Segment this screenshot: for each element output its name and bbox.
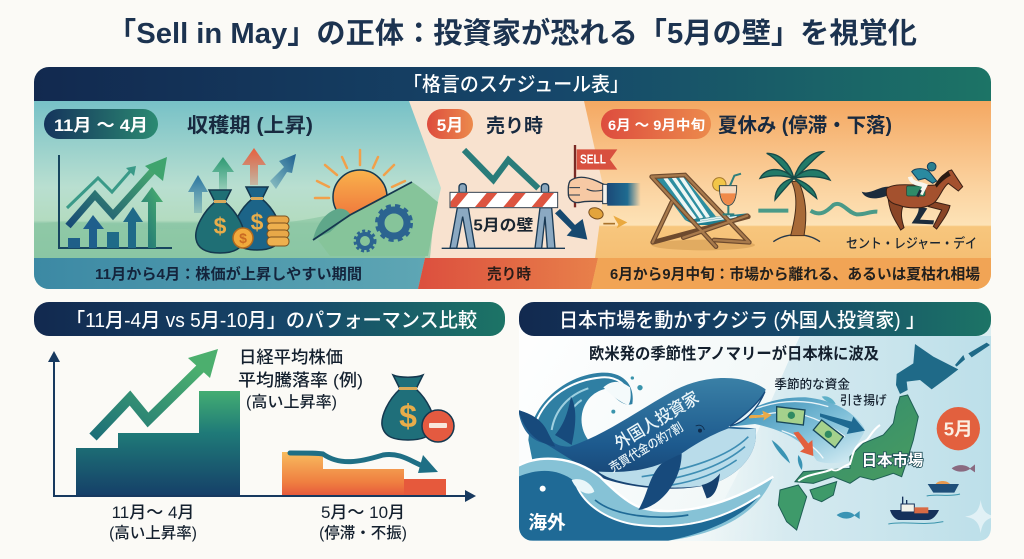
- label: Nikkei average: 平均騰落率 (例): [238, 371, 363, 390]
- icon: money bag minus: [382, 375, 454, 442]
- heading: harvest: 収穫期 (上昇): [187, 114, 313, 137]
- pill: Nov to Apr: [44, 109, 158, 139]
- sparkle: [966, 500, 991, 533]
- whale panel background: [519, 310, 991, 541]
- label: Nikkei average: [238, 348, 363, 411]
- icon: deck chair and drink: [652, 174, 755, 250]
- performance header: [34, 302, 505, 336]
- icon: money bags with arrows: $: [239, 230, 247, 246]
- icon: SELL flag: SELL: [580, 153, 606, 167]
- panel: foreign investor whale: [518, 302, 997, 541]
- icon: barrier: [442, 184, 565, 248]
- icon: money bags with arrows: $: [251, 209, 264, 235]
- bottom strip: rising period: 11月から4月：株価が上昇しやすい期間: [95, 265, 362, 283]
- pill: June to mid September: 6月 〜 9月中旬: [608, 117, 705, 133]
- icon: summer group: [652, 152, 963, 250]
- label: seasonal outflow: 季節的な資金: [774, 377, 850, 392]
- label: Japan market: 日本市場: [862, 451, 923, 469]
- schedule header bar: 「格言のスケジュール表」: [403, 73, 629, 96]
- arrow: stagnant trend: [290, 453, 438, 473]
- pill: June to mid September: [601, 109, 711, 139]
- heading: summer break: 夏休み (停滞・下落): [718, 114, 892, 137]
- icon: coin and arrow: [587, 206, 627, 228]
- whale body: [518, 378, 766, 489]
- icon: barrier: 5月の壁: [473, 216, 534, 234]
- pill: Nov to Apr: 11月 〜 4月: [54, 116, 148, 135]
- label: Nov to Apr: [109, 503, 197, 542]
- bottom strip: summer: [591, 258, 991, 289]
- label: Nikkei average: 日経平均株価: [239, 348, 343, 367]
- icon: SELL flag: [575, 145, 617, 207]
- bottom strip: sell: [418, 258, 598, 289]
- icon: racehorse and jockey: [862, 162, 963, 230]
- icon: cargo ship: [888, 497, 943, 524]
- whale header: [519, 302, 991, 336]
- label: seasonal outflow: 引き揚げ: [840, 392, 887, 407]
- label: overseas: 海外: [528, 512, 566, 533]
- title: 「Sell in May」の正体：投資家が恐れる「5月の壁」を視覚化: [107, 16, 917, 50]
- label: Nov to Apr: 11月〜 4月: [112, 503, 194, 522]
- pill: May: 5月: [437, 116, 463, 135]
- performance header: 「11月-4月 vs 5月-10月」のパフォーマンス比較: [66, 309, 477, 332]
- schedule header bar: [34, 67, 991, 101]
- label: Nov to Apr: (高い上昇率): [109, 524, 197, 542]
- bottom strip: sell: 売り時: [487, 266, 531, 283]
- schedule background: [34, 101, 991, 289]
- water stream and bills: [730, 396, 865, 470]
- subheading: 欧米発の季節性アノマリーが日本株に波及: [589, 344, 879, 363]
- big wave: [528, 372, 643, 462]
- bottom strip: summer: 6月から9月中旬：市場から離れる、あるいは夏枯れ相場: [610, 265, 980, 283]
- panel: schedule: [34, 67, 991, 289]
- arrow: down: [555, 209, 587, 240]
- label: May to Oct: 5月〜 10月: [321, 503, 405, 522]
- icon: May wall and hand group: [442, 145, 641, 248]
- map: Japan: [778, 343, 990, 530]
- label: seasonal outflow: [774, 377, 887, 407]
- whale flippers: [638, 453, 720, 510]
- arrow: rising trend: [93, 349, 218, 437]
- icon: fish: [952, 464, 975, 472]
- icon: sun and gears: [313, 150, 438, 256]
- icon: palm tree: [760, 152, 830, 242]
- whale header: 日本市場を動かすクジラ (外国人投資家) 」: [559, 309, 925, 332]
- icon: rising chart: [59, 155, 172, 248]
- label: May to Oct: (停滞・不振): [319, 524, 407, 542]
- panel: performance comparison: [34, 302, 505, 542]
- icon: falling line: [464, 150, 538, 188]
- label: Nikkei average: (高い上昇率): [246, 393, 337, 411]
- pill: May: [427, 109, 473, 139]
- bar chart: [48, 351, 476, 502]
- icon: blue fish: [837, 511, 860, 519]
- label: foreign investors: 売買代金の約7割: [606, 419, 686, 475]
- icon: money bag minus: $: [399, 398, 417, 434]
- icon: money bags with arrows: [188, 148, 296, 253]
- icon: boat: [927, 481, 960, 496]
- bottom strip: rising period: [34, 258, 425, 289]
- foreground wave: [518, 459, 773, 541]
- badge: May: 5月: [944, 418, 973, 439]
- whale illustration: [518, 343, 997, 541]
- badge: May: [937, 407, 980, 450]
- icon: stagnation line: [758, 204, 877, 214]
- icon: money bags with arrows: $: [214, 213, 227, 239]
- label: foreign investors: [608, 390, 700, 473]
- label: St Leger Day: セント・レジャー・デイ: [846, 235, 977, 251]
- label: foreign investors: 外国人投資家: [611, 387, 702, 453]
- icon: hand: [568, 177, 641, 206]
- heading: sell time: 売り時: [486, 115, 543, 137]
- label: May to Oct: [319, 503, 407, 542]
